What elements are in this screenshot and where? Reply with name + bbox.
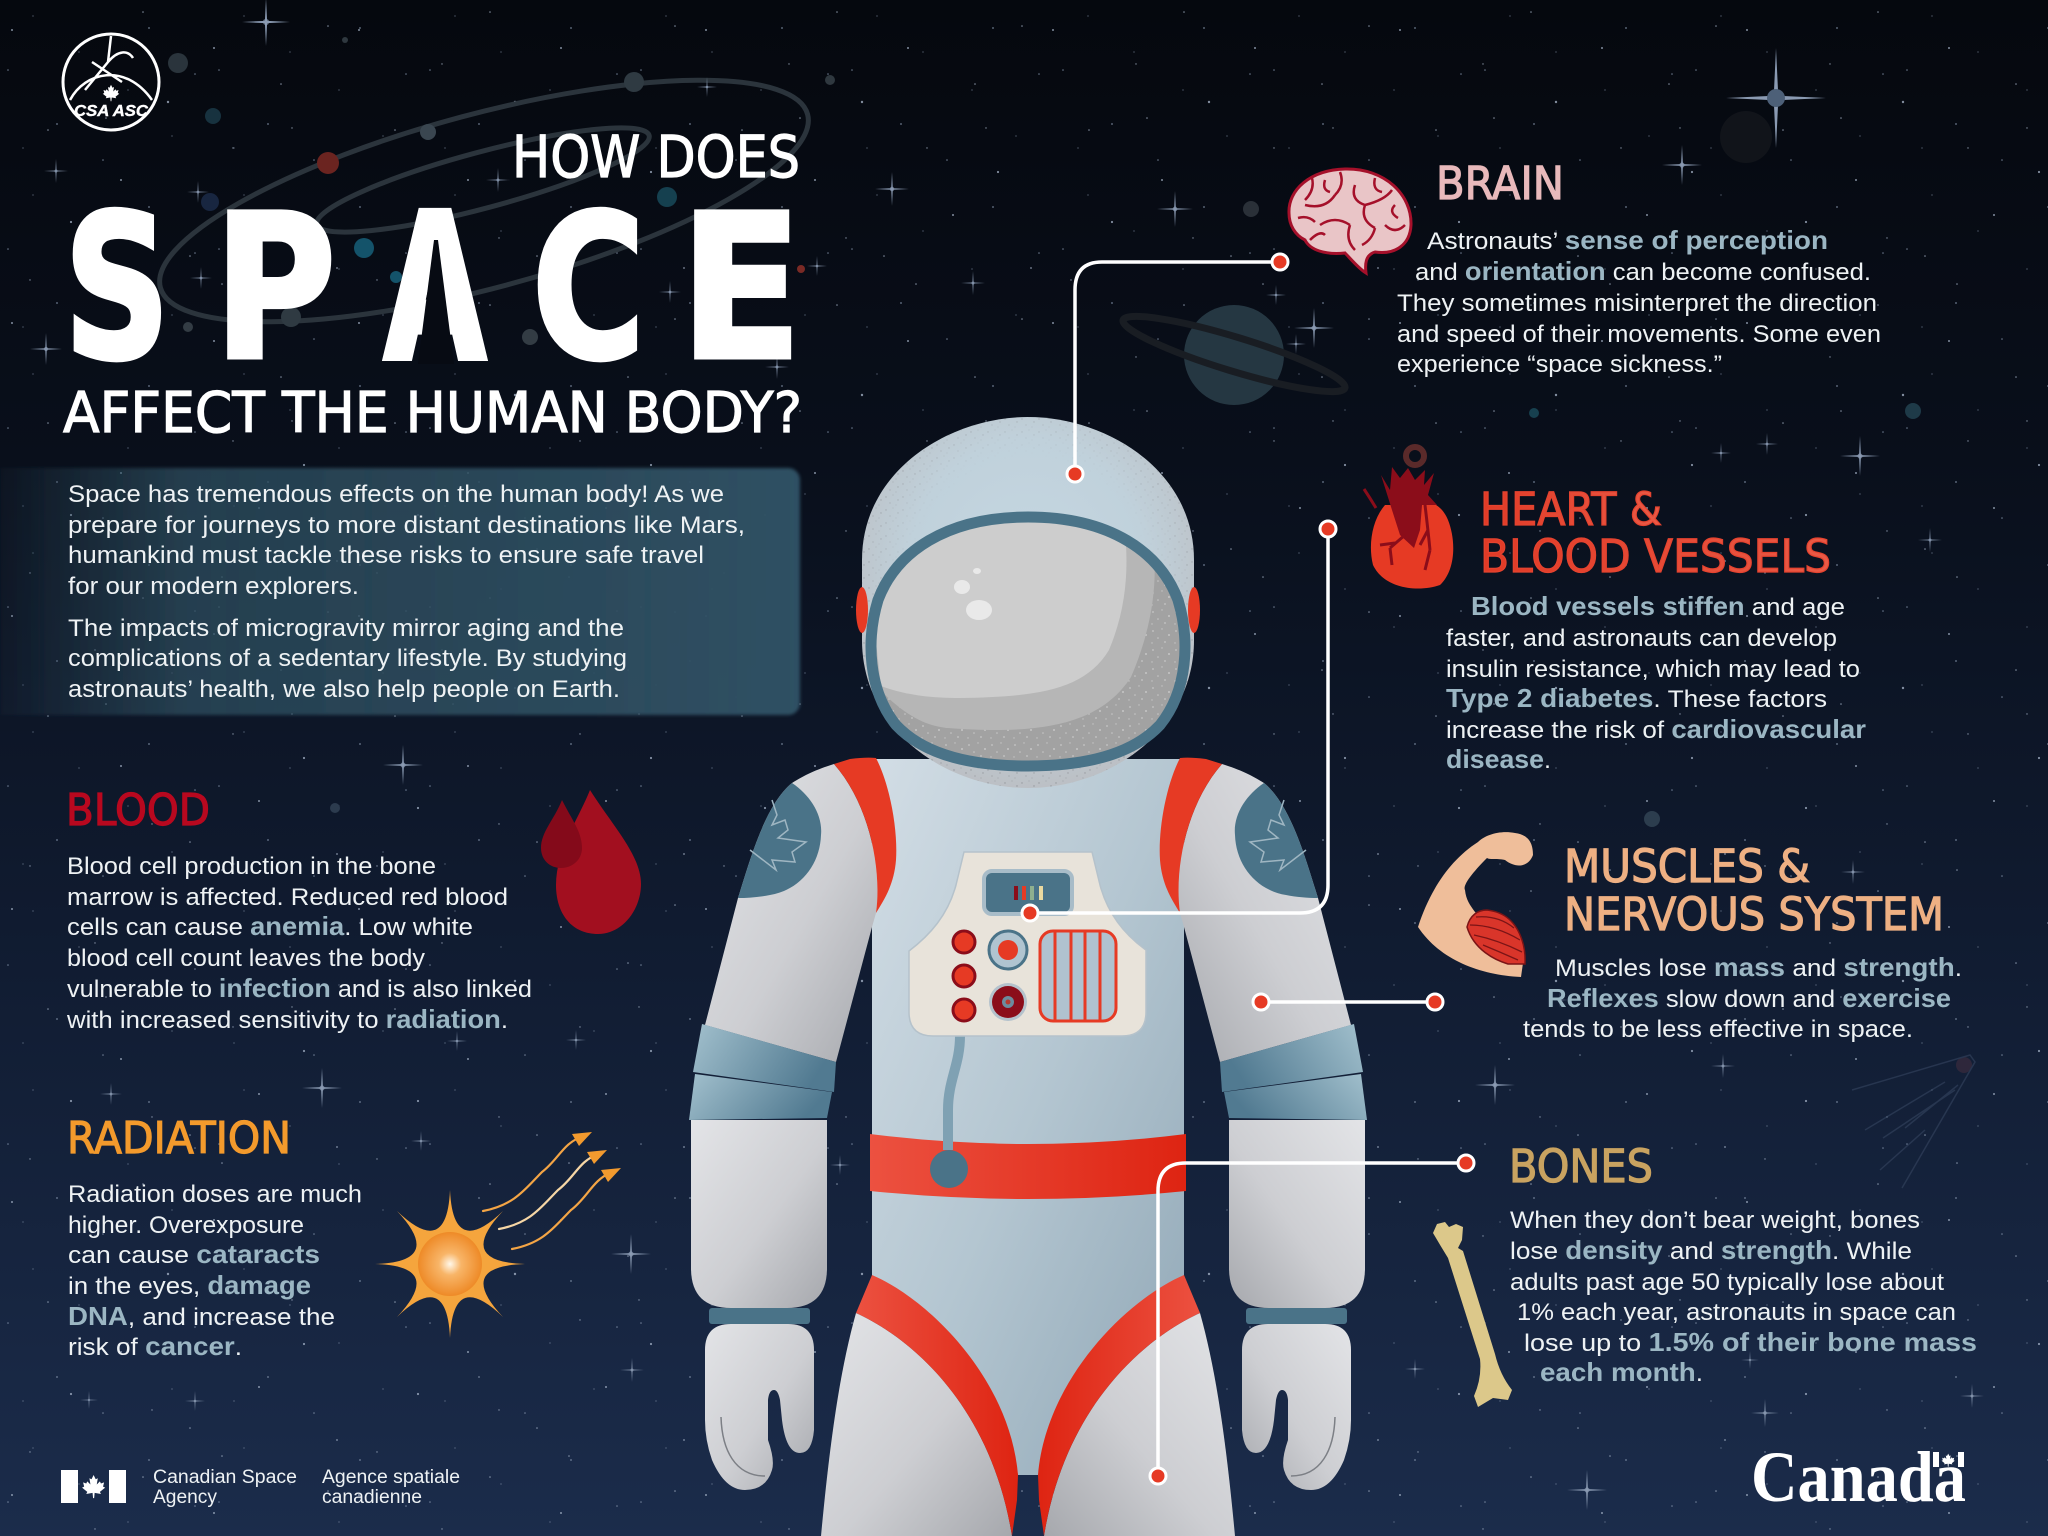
section: muscles and nervous system [1418,832,1962,1043]
section: brain: They sometimes misinterpret the direction [1397,290,1877,317]
icon: brain [1289,169,1411,273]
panel: introduction: prepare for journeys to more distant destinations like Mars, [68,512,745,539]
footer: agency signature: Canadian Space [153,1467,297,1488]
astronaut: right arm [1160,758,1367,1490]
title word: SPACE: A [385,172,485,404]
footer: agency signature: canadienne [322,1487,422,1508]
section: blood: vulnerable to infection and is also linked [67,973,532,1003]
section: muscles and nervous system: tends to be less effective in space. [1523,1016,1913,1043]
section: heart and blood vessels: insulin resistance, which may lead to [1446,656,1860,683]
section: blood: cells can cause anemia. Low white [67,911,473,941]
section: heart and blood vessels: Blood vessels stiffen and age [1471,591,1845,621]
icon: bone [1433,1222,1512,1407]
section: bones: When they don’t bear weight, bones [1510,1207,1920,1234]
section: heart and blood vessels [1364,447,1866,774]
section: blood: marrow is affected. Reduced red blood [67,884,508,911]
section: brain: Astronauts’ sense of perception [1427,225,1828,255]
section: radiation: higher. Overexposure [68,1212,304,1239]
section: radiation: in the eyes, damage [68,1270,311,1300]
icon: heart [1364,447,1453,588]
section: muscles and nervous system: NERVOUS SYSTEM [1564,888,1944,941]
section: blood: blood cell count leaves the body [67,945,426,972]
section: bones: BONES [1509,1140,1653,1193]
panel: introduction: astronauts’ health, we also help people on Earth. [68,676,620,703]
section: blood: with increased sensitivity to radiation. [66,1004,508,1034]
panel: introduction: humankind must tackle these risks to ensure safe travel [68,542,704,569]
background: faint satellite [1852,1055,1975,1188]
wordmark: Canada: Canada [1751,1437,1966,1517]
astronaut: right leg [1038,1275,1235,1536]
section: muscles and nervous system: Reflexes slow down and exercise [1547,983,1951,1013]
section: radiation [67,1113,621,1361]
logo: CSA ASC [63,34,159,130]
footer: agency signature [61,1467,460,1508]
connector: muscles [1253,994,1443,1010]
section: radiation: Radiation doses are much [68,1181,362,1208]
section: radiation: DNA, and increase the [68,1301,335,1331]
panel: introduction: The impacts of microgravity mirror aging and the [68,615,624,642]
helmet: visor [860,500,1190,770]
title word: SPACE: E [680,172,802,404]
astronaut: helmet [856,417,1200,788]
section: radiation: risk of cancer. [68,1331,242,1361]
astronaut: torso [872,759,1184,1475]
icon: Canadian flag [61,1470,126,1503]
section: bones: lose density and strength . While [1510,1235,1912,1265]
section: brain: and orientation can become confused. [1415,256,1871,286]
panel: introduction: for our modern explorers. [68,573,359,600]
section: radiation: can cause cataracts [68,1239,320,1269]
icon: radiating star [375,1132,621,1338]
section: muscles and nervous system: MUSCLES & [1564,840,1810,893]
section: heart and blood vessels: Type 2 diabetes . These factors [1446,683,1827,713]
section: brain: experience “space sickness.” [1397,351,1722,378]
section: blood [66,785,641,1034]
section: blood: Blood cell production in the bone [67,853,436,880]
title word: SPACE: C [532,172,645,404]
section: heart and blood vessels: HEART & [1480,483,1662,536]
connector: brain [1067,254,1288,482]
title [63,123,802,446]
title word: SPACE: S [64,172,170,404]
connector: bones [1150,1155,1474,1484]
footer: agency signature: Agency [153,1487,218,1508]
section: heart and blood vessels: faster, and astronauts can develop [1446,625,1837,652]
section: bones: 1% each year, astronauts in space can [1517,1299,1956,1326]
section: heart and blood vessels: increase the risk of cardiovascular [1446,714,1866,744]
title: AFFECT THE HUMAN BODY? [63,381,802,446]
panel: introduction: complications of a sedentary lifestyle. By studying [68,645,627,672]
icon: blood drops [541,790,641,934]
section: bones: lose up to 1.5% of their bone mass [1524,1327,1977,1357]
astronaut: tube and clip [930,1036,968,1188]
section: brain: BRAIN [1436,157,1564,210]
footer: agency signature: Agence spatiale [322,1467,460,1488]
title word: SPACE [64,172,802,404]
section: heart and blood vessels: BLOOD VESSELS [1480,530,1831,583]
panel: introduction: Space has tremendous effects on the human body! As we [68,481,724,508]
section: muscles and nervous system: Muscles lose mass and strength . [1555,952,1962,982]
title: HOW DOES [512,123,800,191]
icon: flexed arm [1418,832,1533,977]
panel: introduction [0,468,800,715]
section: heart and blood vessels: disease. [1446,744,1551,774]
astronaut: chest control panel [909,852,1146,1036]
background: orbits and planets [138,30,1921,827]
title word: SPACE: P [214,172,336,404]
connector: heart [1022,521,1336,921]
section: bones [1433,1140,1977,1407]
section: bones: adults past age 50 typically lose about [1510,1269,1944,1296]
astronaut: belt [870,1134,1186,1199]
section: brain [1289,157,1881,378]
logo: CSA ASC: CSA ASC [74,103,148,120]
astronaut [689,417,1367,1536]
section: blood: BLOOD [66,785,210,836]
astronaut: left arm [689,758,896,1490]
background: ringed planet [1118,304,1350,405]
section: brain: and speed of their movements. Some even [1397,321,1881,348]
section: radiation: RADIATION [67,1113,291,1164]
astronaut: left leg [821,1275,1018,1536]
section: bones: each month . [1540,1357,1703,1387]
